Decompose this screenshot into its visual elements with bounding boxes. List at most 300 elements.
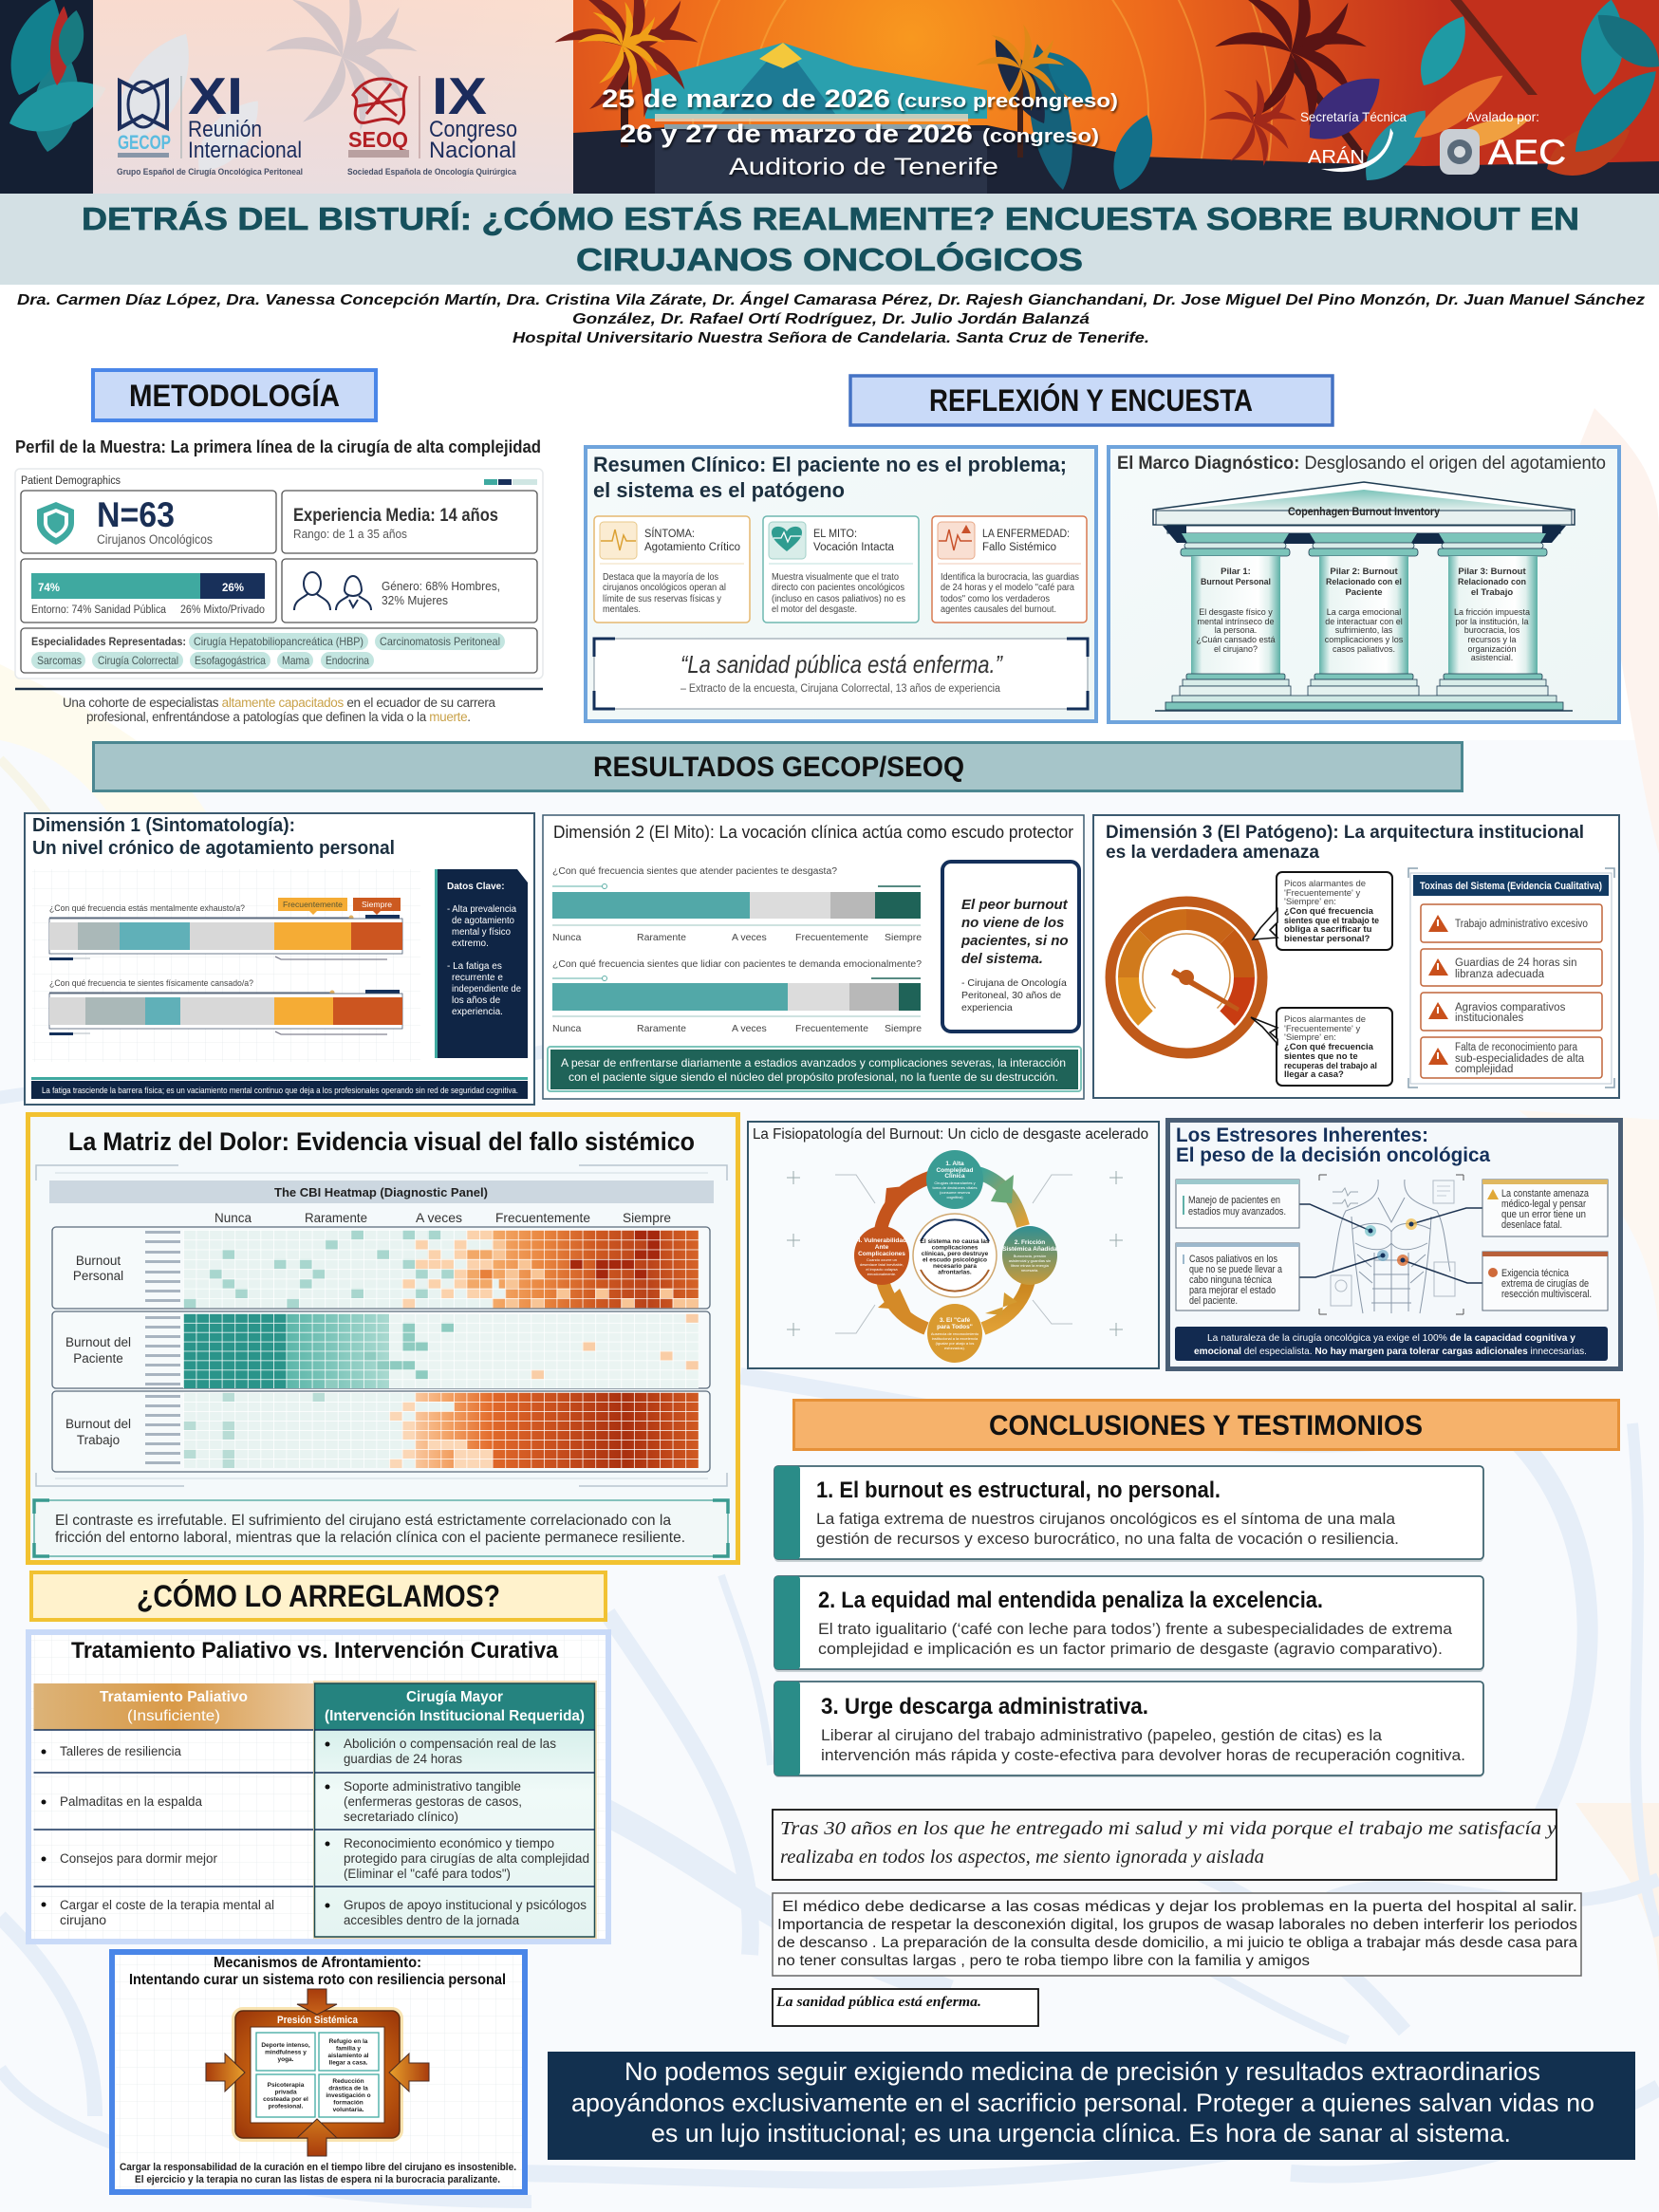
column: major surgery bbox=[313, 1681, 597, 1939]
panel: inherent stressors: El peso de la decisión oncológica bbox=[1176, 1143, 1491, 1166]
icon: shield bbox=[37, 502, 74, 545]
pressure box: aislamiento al bbox=[328, 2053, 369, 2059]
panel: system toxins: libranza adecuada bbox=[1455, 969, 1545, 980]
callout: sacrifice wellbeing bbox=[1253, 872, 1392, 950]
card: specialities: Cirugía Hepatobiliopancreática (HBP) bbox=[194, 635, 363, 648]
panel: inherent stressors bbox=[1167, 1120, 1621, 1368]
conclusion 1: 1. El burnout es estructural, no personal. bbox=[816, 1478, 1221, 1503]
heatmap row: patient burnout: Burnout del bbox=[65, 1335, 131, 1349]
pressure box: mindfulness y bbox=[265, 2050, 307, 2055]
card: work setting bar bbox=[21, 559, 276, 623]
cycle step 4: Cuando ocurre un bbox=[867, 1257, 897, 1262]
column: major surgery: Grupos de apoyo institucional y psicólogos bbox=[344, 1898, 587, 1912]
panel: system toxins: institucionales bbox=[1455, 1013, 1523, 1024]
title band bbox=[0, 194, 1659, 285]
stressor: palliative cases: del paciente. bbox=[1189, 1295, 1238, 1307]
pillar 1: Pilar 1: bbox=[1221, 567, 1251, 577]
key data panel: - La fatiga es bbox=[447, 961, 502, 972]
chart: patients wear out: A veces bbox=[732, 932, 767, 943]
panel: pain matrix: La Matriz del Dolor: Evidencia visual del fallo sistémico bbox=[68, 1127, 695, 1156]
pillar 3: La fricción impuesta bbox=[1454, 607, 1530, 617]
panel: pain matrix: Siempre bbox=[623, 1210, 671, 1225]
card: disease: todos" como los verdaderos bbox=[941, 594, 1050, 604]
pressure box: Reducción bbox=[332, 2078, 364, 2085]
SEOQ logo: SEOQ bbox=[348, 127, 408, 152]
panel: pain matrix: Frecuentemente bbox=[495, 1210, 590, 1225]
cycle step 1: Complejidad bbox=[936, 1167, 974, 1174]
chart: emotional demand: A veces bbox=[732, 1023, 767, 1034]
stressor: legal threat: médico-legal y pensar bbox=[1501, 1199, 1586, 1210]
card: disease: agentes causales del burnout. bbox=[941, 604, 1056, 615]
cycle step 4: desenlace fatal inevitable, bbox=[860, 1262, 904, 1267]
pillar 3: organización bbox=[1467, 644, 1517, 654]
callout: irrefutable contrast bbox=[34, 1500, 728, 1556]
pressure box: Psicoterapia bbox=[268, 2082, 305, 2089]
takeaway band: La naturaleza de la cirugía oncológica ya exige el 100% de la capacidad cognitiva y bbox=[1207, 1332, 1575, 1344]
cycle step 4: 4. Vulnerabilidad bbox=[857, 1237, 906, 1244]
heatmap row: work burnout: Trabajo bbox=[77, 1433, 120, 1447]
stressor: legal threat: desenlace fatal. bbox=[1501, 1219, 1562, 1231]
authors: González, Dr. Rafael Ortí Rodríguez, Dr. Julio Jordán Balanzá bbox=[572, 311, 1090, 327]
pillar 3: por la institución, la bbox=[1455, 617, 1529, 626]
heatmap row: patient burnout bbox=[52, 1311, 710, 1388]
heading: Conclusiones: CONCLUSIONES Y TESTIMONIOS bbox=[989, 1410, 1423, 1441]
key data panel: extremo. bbox=[452, 939, 489, 949]
chart: emotional demand: Nunca bbox=[552, 1023, 582, 1034]
congress number XI: Internacional bbox=[188, 138, 302, 163]
heading: Resultados: RESULTADOS GECOP/SEOQ bbox=[593, 752, 964, 783]
panel: system toxins: complejidad bbox=[1455, 1064, 1513, 1075]
stressor: palliative cases bbox=[1176, 1243, 1299, 1310]
callout: sacrifice wellbeing: bienestar personal? bbox=[1284, 934, 1370, 944]
cycle step 2 bbox=[1002, 1226, 1057, 1285]
takeaway band: A pesar de enfrentarse diariamente a estadios avanzados y complicaciones severas, la interacción bbox=[561, 1056, 1066, 1069]
pillar 2: casos paliativos. bbox=[1333, 644, 1395, 654]
congress number IX: Nacional bbox=[429, 138, 516, 163]
diagram: temple of three pillars: Copenhagen Burnout Inventory bbox=[1288, 505, 1440, 518]
panel: inherent stressors: Los Estresores Inherentes: bbox=[1176, 1124, 1428, 1146]
takeaway band bbox=[1175, 1327, 1608, 1361]
heatmap row: personal burnout: Burnout bbox=[76, 1254, 121, 1268]
cycle step 3: (igualar por abajo a los bbox=[936, 1341, 974, 1346]
caption: coping bbox=[120, 2162, 516, 2185]
cycle arrows bbox=[881, 1173, 1029, 1329]
pressure box: drástica de la bbox=[328, 2086, 368, 2091]
authors: Hospital Universitario Nuestra Señora de Candelaria. Santa Cruz de Tenerife. bbox=[513, 330, 1149, 346]
callout: no recovery: Picos alarmantes de bbox=[1284, 1014, 1366, 1025]
key data panel: recurrente e bbox=[452, 973, 503, 983]
diagram: temple of three pillars bbox=[1153, 482, 1575, 711]
closing statement banner: No podemos seguir exigiendo medicina de precisión y resultados extraordinarios bbox=[624, 2057, 1540, 2086]
card: disease: de 24 horas y el modelo "café para bbox=[941, 583, 1074, 593]
conclusion 1: gestión de recursos y exceso burocrático, no una falta de vocación o resiliencia. bbox=[816, 1530, 1399, 1548]
cycle step 2: Burocracia, presión bbox=[1014, 1254, 1046, 1258]
chart: physical tiredness bbox=[49, 978, 402, 1035]
card: experience: Rango: de 1 a 35 años bbox=[293, 527, 407, 541]
heatmap row: work burnout bbox=[52, 1391, 710, 1472]
congress dates: Auditorio de Tenerife bbox=[729, 154, 998, 180]
panel: clinical summary: Resumen Clínico: El paciente no es el problema; bbox=[593, 453, 1067, 476]
pillar 2: Paciente bbox=[1345, 587, 1383, 598]
closing statement banner: apoyándonos exclusivamente en el sacrificio personal. Proteger a quienes salvan vidas no bbox=[571, 2089, 1594, 2117]
takeaway band: con el paciente sigue siendo el núcleo del propósito profesional, no la fuente de su destrucción. bbox=[569, 1070, 1058, 1084]
pillar 3: recursos y la bbox=[1467, 635, 1517, 644]
stressor: palliative cases: Casos paliativos en los bbox=[1189, 1254, 1277, 1265]
cycle centre: clínicas, pero destruye bbox=[922, 1251, 989, 1257]
cycle step 4: Complicaciones bbox=[858, 1251, 905, 1257]
column: major surgery: Reconocimiento económico y tiempo bbox=[344, 1836, 554, 1850]
card: myth bbox=[763, 516, 919, 623]
congress dates: 26 y 27 de marzo de 2026 bbox=[620, 120, 973, 148]
panel: coping mechanisms: Intentando curar un sistema roto con resiliencia personal bbox=[129, 1972, 506, 1988]
card: work setting bar: 26% bbox=[222, 583, 244, 594]
panel: dimension 3: es la verdadera amenaza bbox=[1106, 843, 1319, 863]
pillar 3 bbox=[1437, 533, 1548, 696]
lighter and darker cells in the hot block bbox=[493, 1239, 699, 1308]
conclusion 3: Liberar al cirujano del trabajo administrativo (papeleo, gestión de citas) es la bbox=[821, 1726, 1383, 1744]
chart: emotional demand bbox=[552, 959, 922, 1034]
cycle step 4: el impacto colapsa bbox=[866, 1267, 898, 1272]
chart: patients wear out bbox=[552, 866, 922, 943]
stressor: palliative cases: que no se puede llevar a bbox=[1189, 1264, 1283, 1275]
callout: irrefutable contrast: fricción del entorno laboral, mientras que la relación clínica con el paciente permanece resiliente. bbox=[55, 1530, 685, 1546]
callout: irrefutable contrast: El contraste es irrefutable. El sufrimiento del cirujano está estrictamente correlacionado con la bbox=[55, 1513, 671, 1529]
panel: dimension 3 bbox=[1093, 815, 1619, 1098]
card: specialities: Sarcomas bbox=[37, 654, 82, 667]
panel: pain matrix: Raramente bbox=[305, 1210, 367, 1225]
congress dates: (congreso) bbox=[982, 126, 1099, 147]
cycle centre bbox=[913, 1214, 997, 1297]
card: disease: Fallo Sistémico bbox=[982, 542, 1056, 553]
pillar 1: mental intrínseco de bbox=[1197, 617, 1275, 626]
cycle step 3: esforzados). bbox=[944, 1346, 965, 1350]
takeaway band bbox=[548, 1047, 1081, 1091]
cycle centre: El sistema no causa las bbox=[921, 1238, 990, 1245]
card: work setting bar: 26% Mixto/Privado bbox=[180, 604, 265, 616]
panel: system toxins: Trabajo administrativo excesivo bbox=[1455, 919, 1588, 930]
card: gender bbox=[282, 559, 537, 623]
panel: coping mechanisms bbox=[112, 1952, 525, 2192]
card: disease: Identifica la burocracia, las guardias bbox=[941, 572, 1079, 583]
callout: sacrifice wellbeing: ¿Con qué frecuencia bbox=[1284, 906, 1374, 917]
column: major surgery: protegido para cirugías de alta complejidad bbox=[344, 1851, 589, 1866]
authors: Dra. Carmen Díaz López, Dra. Vanessa Concepción Martín, Dra. Cristina Vila Zárate, Dr. Ángel Camarasa Pérez, Dr. Rajesh Gianchandani, Dr. Jose Miguel Del Pino Monzón, Dr. Juan Manuel Sánchez bbox=[17, 292, 1645, 308]
foliage left bbox=[0, 0, 113, 194]
card: work setting bar: Entorno: 74% Sanidad Pública bbox=[31, 604, 167, 616]
stressor: technical demand: resección multivisceral. bbox=[1501, 1289, 1592, 1300]
congress dates: 25 de marzo de 2026 bbox=[602, 84, 890, 113]
card: symptom: cirujanos oncológicos operan al bbox=[603, 583, 726, 593]
stressor: advanced stages: Manejo de pacientes en bbox=[1188, 1195, 1280, 1206]
card: symptom: mentales. bbox=[603, 604, 641, 615]
panel: clinical summary bbox=[586, 447, 1096, 721]
key data panel bbox=[435, 869, 528, 1058]
card: myth: (incluso en casos paliativos) no es bbox=[772, 594, 905, 604]
pressure box: llegar a casa. bbox=[329, 2059, 368, 2067]
foliage right bbox=[1209, 0, 1659, 193]
callout: sacrifice wellbeing: obliga a sacrificar tu bbox=[1284, 924, 1372, 935]
congress number IX: Congreso bbox=[429, 117, 517, 142]
pillar 2: Relacionado con el bbox=[1326, 577, 1402, 587]
stressor: legal threat bbox=[1482, 1180, 1608, 1236]
pressure box: familia y bbox=[336, 2046, 361, 2052]
caption: sample profile: Una cohorte de especialistas altamente capacitados en el ecuador de su carrera bbox=[63, 696, 495, 710]
pressure box: Deporte intenso, bbox=[261, 2042, 310, 2049]
pressure box: formación bbox=[333, 2099, 363, 2107]
pillar 3: Pilar 3: Burnout bbox=[1458, 567, 1526, 577]
congress number XI: Reunión bbox=[188, 117, 262, 142]
column: palliative: Talleres de resiliencia bbox=[60, 1744, 181, 1758]
takeaway band: La fatiga trasciende la barrera física; es un vaciamiento mental continuo que deja a los profesionales operando sin red de seguridad cognitiva. bbox=[42, 1086, 518, 1096]
stressor: advanced stages: estadios muy avanzados. bbox=[1188, 1206, 1286, 1218]
title band: DETRÁS DEL BISTURÍ: ¿CÓMO ESTÁS REALMENTE? ENCUESTA SOBRE BURNOUT EN bbox=[82, 201, 1579, 236]
heatmap row: work burnout: Burnout del bbox=[65, 1417, 131, 1431]
card: disease bbox=[932, 516, 1087, 623]
callout: sacrifice wellbeing: 'Siempre' en: bbox=[1284, 897, 1336, 907]
panel: system toxins bbox=[1408, 868, 1614, 1087]
pillar 2: Pilar 2: Burnout bbox=[1330, 567, 1398, 577]
quote: public health bbox=[594, 639, 1088, 709]
congress dates bbox=[602, 84, 1118, 180]
quote: worst burnout: no viene de los bbox=[961, 915, 1064, 931]
card: specialities: Cirugía Colorrectal bbox=[98, 654, 178, 667]
panel: pain matrix bbox=[28, 1114, 738, 1562]
conclusion 1 bbox=[774, 1466, 1483, 1562]
cycle step 1 bbox=[926, 1150, 983, 1209]
pillar 3: Relacionado con bbox=[1458, 577, 1526, 587]
quote: worst burnout: pacientes, si no bbox=[960, 933, 1069, 949]
heatmap row: personal burnout: Personal bbox=[73, 1269, 123, 1283]
caption: coping: El ejercicio y la terapia no curan las listas de espera ni la burocracia paralizante. bbox=[135, 2174, 500, 2185]
chart: patients wear out: Nunca bbox=[552, 932, 582, 943]
teal scattered cells bbox=[183, 1230, 454, 1308]
callout: sacrifice wellbeing: Picos alarmantes de bbox=[1284, 879, 1366, 889]
testimonial 3: La sanidad pública está enferma. bbox=[775, 1995, 981, 2010]
pressure box: voluntaria. bbox=[333, 2107, 364, 2113]
column: major surgery: guardias de 24 horas bbox=[344, 1752, 462, 1766]
panel: system toxins: Guardias de 24 horas sin bbox=[1455, 957, 1577, 969]
testimonial 1 bbox=[773, 1810, 1556, 1880]
card: symptom: Agotamiento Crítico bbox=[644, 542, 740, 553]
panel: burnout cycle: La Fisiopatología del Burnout: Un ciclo de desgaste acelerado bbox=[753, 1126, 1148, 1143]
callout: sacrifice wellbeing: 'Frecuentemente' y bbox=[1284, 888, 1360, 899]
heading: sample profile: Perfil de la Muestra: La primera línea de la cirugía de alta complejidad bbox=[15, 437, 541, 456]
pillar 3: asistencial. bbox=[1471, 653, 1513, 662]
pressure box: Presión Sistémica bbox=[277, 2015, 359, 2026]
cycle step 4: Ante bbox=[875, 1244, 889, 1251]
key data panel: de agotamiento bbox=[452, 916, 514, 926]
panel: coping mechanisms: Mecanismos de Afrontamiento: bbox=[214, 1955, 421, 1971]
column: major surgery: Abolición o compensación real de las bbox=[344, 1737, 556, 1751]
pillar 3: el Trabajo bbox=[1471, 587, 1513, 598]
conclusion 2: 2. La equidad mal entendida penaliza la excelencia. bbox=[818, 1588, 1323, 1613]
stressor: technical demand bbox=[1482, 1252, 1608, 1310]
panel: dimension 1: Dimensión 1 (Sintomatología): bbox=[32, 814, 295, 836]
card: myth: directo con pacientes oncológicos bbox=[772, 583, 904, 593]
panel: burnout cycle bbox=[748, 1122, 1159, 1368]
chart: patients wear out: Frecuentemente bbox=[795, 932, 868, 943]
column: major surgery: Soporte administrativo tangible bbox=[344, 1779, 521, 1794]
panel: system toxins: Toxinas del Sistema (Evidencia Cualitativa) bbox=[1420, 881, 1602, 892]
cycle step 1: toma de decisiones vitales bbox=[933, 1185, 977, 1190]
callout: no recovery: sientes que no te bbox=[1284, 1051, 1358, 1062]
cycle centre: afrontarlas. bbox=[938, 1270, 972, 1275]
cycle step 2: librar minan la energía bbox=[1011, 1263, 1050, 1268]
cycle step 2: asistencial y guardias sin bbox=[1009, 1258, 1051, 1263]
cycle step 2: Sistémica Añadida bbox=[1002, 1246, 1057, 1253]
cycle step 3: institucional a la excelencia bbox=[932, 1336, 979, 1341]
conclusion 3: 3. Urge descarga administrativa. bbox=[821, 1694, 1148, 1719]
card: myth: el motor del desgaste. bbox=[772, 604, 857, 615]
key data panel: experiencia. bbox=[452, 1007, 503, 1017]
heading: Resultados bbox=[93, 742, 1462, 791]
card: symptom: SÍNTOMA: bbox=[644, 528, 695, 540]
pillar 2: de interactuar con el bbox=[1325, 617, 1403, 626]
column: palliative: Palmaditas en la espalda bbox=[60, 1794, 202, 1809]
chart: mental exhaustion bbox=[49, 898, 402, 960]
testimonial 1: realizaba en todos los aspectos, me siento ignorada y aislada bbox=[780, 1847, 1264, 1868]
heatmap row: patient burnout: Paciente bbox=[73, 1351, 123, 1366]
stressor: palliative cases: para mejorar el estado bbox=[1189, 1285, 1276, 1296]
cycle step 3: Ausencia de reconocimiento bbox=[931, 1331, 979, 1336]
card: sample size bbox=[21, 491, 276, 553]
pressure box: privada bbox=[274, 2090, 297, 2095]
testimonial 3 bbox=[773, 1989, 1038, 2026]
closing statement banner: es un lujo institucional; es una urgencia clínica. Es hora de sanar al sistema. bbox=[651, 2119, 1511, 2147]
callout: sacrifice wellbeing: sientes que el trabajo te bbox=[1284, 916, 1379, 926]
column: palliative: Cargar el coste de la terapia mental al bbox=[60, 1898, 274, 1912]
panel: diagnostic framework bbox=[1109, 447, 1619, 722]
heatmap row: personal burnout bbox=[52, 1227, 710, 1309]
panel: dimension 1 bbox=[25, 813, 534, 1105]
stressor: legal threat: que un error tiene un bbox=[1501, 1209, 1586, 1220]
quote: worst burnout bbox=[942, 862, 1079, 1032]
caption: sample profile: profesional, enfrentándose a patologías que definen la vida o la muerte. bbox=[86, 710, 471, 724]
card: symptom: límite de sus reservas físicas y bbox=[603, 594, 721, 604]
panel: dimension 2 bbox=[543, 815, 1084, 1099]
congress number IX bbox=[430, 78, 516, 158]
cycle step 1: Cirugías demandantes y bbox=[934, 1180, 976, 1185]
patient demographics label: Patient Demographics bbox=[21, 475, 121, 487]
congress dates: (curso precongreso) bbox=[897, 91, 1118, 112]
volcano illustration bbox=[645, 43, 987, 194]
torso diagram bbox=[1319, 1175, 1463, 1314]
cycle step 1: (consume reserva bbox=[940, 1190, 971, 1195]
card: symptom: Destaca que la mayoría de los bbox=[603, 572, 718, 583]
pillar 1: El desgaste físico y bbox=[1199, 607, 1273, 617]
closing statement banner bbox=[548, 2052, 1635, 2160]
GECOP logo bbox=[118, 81, 171, 158]
cycle step 1: Clínica bbox=[944, 1173, 965, 1180]
stressor: technical demand: Exigencia técnica bbox=[1501, 1268, 1570, 1279]
card: sample size: N=63 bbox=[97, 495, 175, 534]
congress number XI bbox=[188, 78, 301, 158]
chart: emotional demand: Frecuentemente bbox=[795, 1023, 868, 1034]
conclusion 2 bbox=[774, 1576, 1483, 1672]
quote: public health: – Extracto de la encuesta, Cirujana Colorrectal, 13 años de experiencia bbox=[680, 683, 1001, 695]
conclusion 2: El trato igualitario (‘café con leche para todos’) frente a subespecialidades de extrema bbox=[818, 1620, 1453, 1638]
quote: worst burnout: del sistema. bbox=[961, 951, 1043, 967]
quote: worst burnout: El peor burnout bbox=[961, 897, 1069, 913]
cycle step 1: 1. Alta bbox=[945, 1161, 964, 1167]
callout: no recovery: recuperas del trabajo al bbox=[1284, 1061, 1377, 1071]
heading: Metodología bbox=[93, 370, 376, 420]
card: gender: Género: 68% Hombres, bbox=[382, 579, 500, 593]
pressure box: investigación o bbox=[326, 2092, 371, 2099]
column: palliative: Tratamiento Paliativo bbox=[100, 1689, 248, 1705]
stressor: advanced stages bbox=[1176, 1180, 1299, 1228]
sponsors: Secretaría Técnica bbox=[1300, 109, 1407, 124]
chart: physical tiredness: ¿Con qué frecuencia te sientes físicamente cansado/a? bbox=[49, 978, 253, 989]
testimonial 2: de descanso . La preparación de la consulta desde domicilio, a mi juicio te obliga a trabajar más desde casa para bbox=[777, 1935, 1577, 1951]
pillar 2: La carga emocional bbox=[1327, 607, 1401, 617]
pressure box: yoga. bbox=[278, 2056, 294, 2063]
panel: dimension 2: Dimensión 2 (El Mito): La vocación clínica actúa como escudo protector bbox=[553, 823, 1073, 842]
panel: dimension 1: Un nivel crónico de agotamiento personal bbox=[32, 837, 395, 859]
cycle step 3 bbox=[927, 1304, 982, 1363]
SEOQ caption: Sociedad Española de Oncología Quirúrgica bbox=[347, 167, 517, 177]
card: myth: EL MITO: bbox=[813, 529, 857, 540]
sponsors: Avalado por: bbox=[1466, 109, 1539, 124]
conclusion 3 bbox=[774, 1682, 1483, 1777]
card: symptom bbox=[594, 516, 750, 623]
pillar 2 bbox=[1308, 533, 1419, 696]
testimonial 2: no tener consultas largas , pero te roba tiempo libre con la familia y amigos bbox=[777, 1953, 1310, 1969]
chart: mental exhaustion: Siempre bbox=[362, 900, 392, 909]
pillar 1: el cirujano? bbox=[1214, 644, 1258, 654]
takeaway band bbox=[31, 1077, 528, 1099]
title band: CIRUJANOS ONCOLÓGICOS bbox=[576, 242, 1083, 277]
key data panel: independiente de bbox=[452, 984, 521, 994]
GECOP caption: Grupo Español de Cirugía Oncológica Peritoneal bbox=[117, 167, 303, 177]
sponsors bbox=[1300, 109, 1566, 175]
conclusion 1: La fatiga extrema de nuestros cirujanos oncológicos es el síntoma de una mala bbox=[816, 1510, 1396, 1528]
chart: patients wear out: Raramente bbox=[637, 932, 686, 943]
card: specialities: Endocrina bbox=[326, 654, 369, 667]
callout: no recovery: 'Frecuentemente' y bbox=[1284, 1024, 1360, 1034]
column: major surgery: accesibles dentro de la jornada bbox=[344, 1913, 519, 1927]
card: experience bbox=[282, 491, 537, 553]
gauge bbox=[1110, 902, 1262, 1053]
foliage centre bbox=[554, 0, 1164, 195]
testimonial 2 bbox=[773, 1893, 1581, 1976]
chart: emotional demand: Siempre bbox=[885, 1023, 922, 1034]
column: palliative: Consejos para dormir mejor bbox=[60, 1851, 218, 1866]
stressor: palliative cases: cabo ninguna técnica bbox=[1189, 1274, 1273, 1286]
callout: no recovery: ¿Con qué frecuencia bbox=[1284, 1042, 1374, 1052]
cycle step 2: 2. Fricción bbox=[1015, 1239, 1045, 1246]
callout: no recovery: llegar a casa? bbox=[1284, 1069, 1344, 1080]
panel: system toxins: sub-especialidades de alta bbox=[1455, 1053, 1585, 1065]
panel: system toxins: Agravios comparativos bbox=[1455, 1002, 1566, 1013]
panel: palliative vs curative table bbox=[28, 1632, 608, 1942]
pillar 1: Burnout Personal bbox=[1201, 577, 1271, 587]
GECOP logo: GECOP bbox=[118, 132, 171, 154]
congress number XI: XI bbox=[188, 66, 243, 125]
caption: sample profile bbox=[63, 696, 495, 724]
card: gender: 32% Mujeres bbox=[382, 593, 448, 607]
pointers bbox=[1299, 1204, 1482, 1283]
pillar 3: burocracia, los bbox=[1464, 625, 1520, 635]
heading: Conclusiones bbox=[793, 1401, 1619, 1450]
cycle step 2: necesaria. bbox=[1021, 1268, 1038, 1273]
callout: no recovery: 'Siempre' en: bbox=[1284, 1032, 1336, 1043]
pillar 1: ¿Cuán cansado está bbox=[1196, 635, 1276, 644]
cycle centre: necesario para bbox=[933, 1263, 977, 1270]
card: experience: Experiencia Media: 14 años bbox=[293, 506, 498, 526]
pressure box: costeada por el bbox=[263, 2096, 308, 2103]
icon: people bbox=[294, 572, 371, 610]
